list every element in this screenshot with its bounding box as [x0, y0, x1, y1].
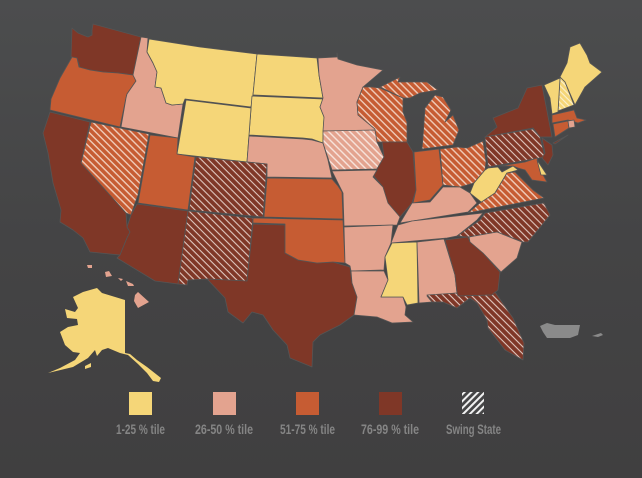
state: Vermont — [544, 78, 560, 114]
state: Hawaii — [87, 265, 149, 308]
state: Mississippi — [381, 242, 418, 305]
state: West Virginia — [470, 166, 518, 205]
state: Michigan — [380, 77, 459, 149]
state: Pennsylvania — [485, 129, 545, 167]
state: Iowa — [323, 130, 384, 170]
state: New Jersey — [542, 138, 553, 165]
state: Connecticut — [553, 121, 569, 137]
state: Georgia — [445, 237, 500, 296]
state: Texas — [207, 224, 357, 367]
state: Missouri — [332, 170, 400, 226]
legend item: 26-50 percentile — [195, 392, 253, 437]
state: Utah — [138, 135, 195, 210]
state: Rhode Island — [568, 120, 575, 128]
state: Wyoming — [177, 100, 251, 162]
state: Colorado — [189, 157, 267, 217]
legend item: 76-99 percentile: 76-99 % tile — [361, 421, 419, 437]
state: Delaware — [537, 160, 547, 175]
state: Kentucky — [400, 187, 477, 223]
state: Illinois — [373, 142, 416, 217]
state: Arkansas — [344, 225, 393, 271]
map: United States — [43, 24, 603, 382]
legend item: swing state: Swing State — [446, 421, 501, 437]
state: Alabama — [417, 239, 457, 303]
state: Maine — [560, 43, 602, 105]
state: Indiana — [413, 149, 443, 203]
state: Virginia — [468, 172, 544, 213]
state: Oregon — [50, 57, 136, 127]
state: North Carolina — [457, 203, 550, 242]
state: Ohio — [440, 141, 486, 187]
state: Oklahoma — [253, 218, 345, 263]
state: California — [43, 112, 130, 255]
state: Nevada — [81, 122, 149, 215]
state: Tennessee — [391, 213, 483, 243]
state: New Hampshire — [558, 77, 574, 111]
state: South Carolina — [469, 232, 522, 272]
state: Massachusetts — [552, 110, 586, 123]
state: Florida — [427, 292, 524, 360]
legend item: 1-25 percentile: 1-25 % tile — [116, 421, 165, 437]
state: Idaho — [121, 37, 183, 138]
state: North Dakota — [253, 54, 323, 98]
state: Washington — [71, 24, 141, 75]
state: Nebraska — [247, 136, 332, 178]
legend item: 76-99 percentile — [361, 392, 419, 437]
legend item: 51-75 percentile: 51-75 % tile — [280, 421, 335, 437]
state: New Mexico — [178, 211, 253, 285]
state: Montana — [147, 39, 257, 107]
legend — [116, 392, 501, 437]
state: Minnesota — [318, 53, 383, 131]
state: Kansas — [264, 178, 343, 219]
legend item: 26-50 percentile: 26-50 % tile — [195, 421, 253, 437]
legend item: 1-25 percentile — [116, 392, 165, 437]
state: Wisconsin — [357, 87, 407, 142]
territory: Puerto Rico — [540, 323, 603, 338]
state: Arizona — [117, 204, 188, 284]
state: Alaska — [48, 288, 161, 382]
legend item: swing state — [446, 392, 501, 437]
state: New York — [485, 85, 552, 137]
state: Louisiana — [351, 271, 413, 323]
state: Maryland — [500, 158, 547, 182]
state: Long Island — [553, 135, 568, 144]
legend item: 51-75 percentile — [280, 392, 335, 437]
state: South Dakota — [249, 96, 324, 143]
